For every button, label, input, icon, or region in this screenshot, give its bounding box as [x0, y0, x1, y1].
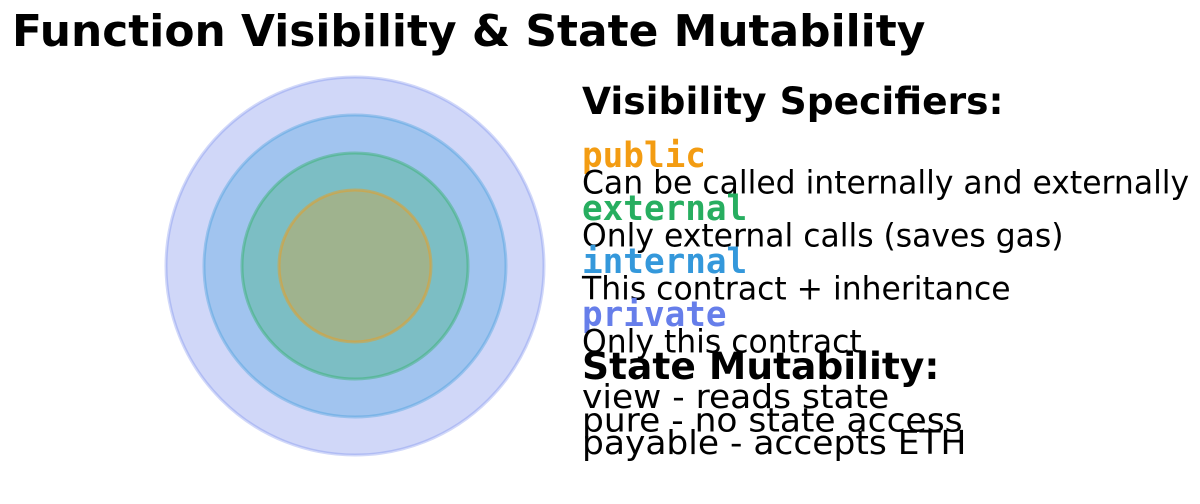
circle: private scope outer — [166, 77, 544, 455]
private specifier: Only this contract — [582, 322, 862, 361]
circle: public scope inner — [279, 190, 431, 342]
private specifier — [582, 295, 862, 361]
external specifier — [582, 189, 1064, 255]
title: Function Visibility & State Mutability — [12, 6, 925, 57]
internal specifier: internal — [582, 242, 747, 282]
state mutability list — [582, 378, 966, 462]
public specifier: Can be called internally and externally — [582, 163, 1189, 202]
external specifier: Only external calls (saves gas) — [582, 216, 1064, 255]
public specifier: public — [582, 136, 706, 176]
external specifier: external — [582, 189, 747, 229]
state mutability heading: State Mutability: — [582, 344, 939, 388]
internal specifier: This contract + inheritance — [581, 269, 1011, 308]
private specifier: private — [582, 295, 727, 335]
internal specifier — [581, 242, 1011, 308]
circle: internal scope — [204, 115, 506, 417]
circle: external scope — [242, 153, 468, 379]
state mutability list: pure - no state access — [582, 401, 963, 439]
state mutability list: payable - accepts ETH — [582, 424, 966, 462]
visibility specifiers heading: Visibility Specifiers: — [582, 79, 1004, 123]
public specifier — [582, 136, 1189, 202]
state mutability list: view - reads state — [582, 378, 889, 416]
nested visibility circles — [166, 77, 544, 455]
